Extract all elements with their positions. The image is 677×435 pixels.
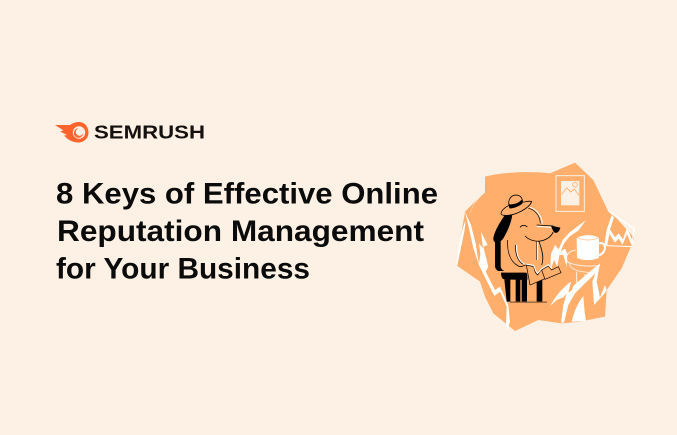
body lines	[508, 240, 543, 267]
table with mug	[566, 235, 632, 287]
title	[56, 178, 438, 286]
logo wordmark: SEMRUSH	[94, 122, 205, 142]
dog character on stool	[493, 195, 561, 303]
flames right and bottom	[550, 211, 635, 323]
muzzle	[525, 225, 553, 241]
feet	[526, 265, 561, 285]
icon: flame comet	[55, 122, 88, 142]
ear	[493, 214, 512, 243]
nose	[551, 226, 560, 233]
head, hat and ear	[493, 195, 560, 260]
stool and chair	[495, 241, 547, 303]
illustration: dog sitting calmly among flames	[456, 162, 635, 331]
mug	[577, 235, 599, 260]
picture frame on wall	[556, 176, 584, 211]
head outline	[508, 209, 556, 241]
eye	[520, 225, 527, 227]
title: 8 Keys of Effective Online	[56, 178, 438, 210]
flames left	[456, 192, 510, 330]
logo: Semrush	[55, 122, 205, 142]
title: for Your Business	[56, 252, 310, 286]
orange background blob	[456, 163, 634, 331]
hat	[509, 195, 522, 205]
title: Reputation Management	[57, 215, 424, 248]
